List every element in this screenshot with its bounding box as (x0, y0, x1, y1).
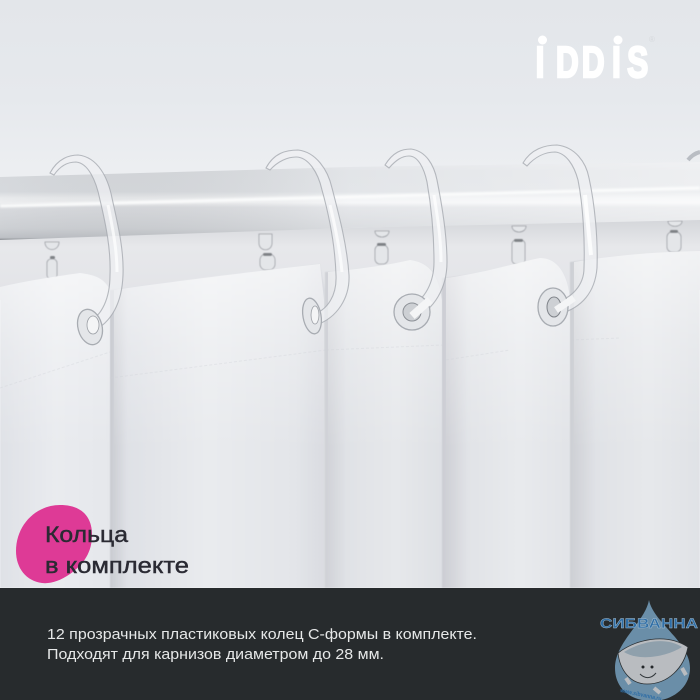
hooks behind the rod (45, 221, 682, 279)
heading: Кольца (45, 522, 129, 547)
ring 1 eyelet (74, 307, 106, 347)
curtain panel 1 (0, 273, 112, 588)
curtain panel 4 (442, 258, 572, 588)
bathtub (618, 639, 688, 693)
ring 2 eyelet (300, 297, 324, 335)
background wall (0, 0, 700, 280)
ring 3 (385, 149, 447, 330)
brand logo iddis: IDDIS (536, 38, 648, 87)
ring 1 (50, 155, 123, 347)
water drop (615, 600, 690, 700)
curtain panel 5 (570, 251, 700, 588)
curtain panel 2 (110, 264, 327, 588)
curtain panel 3 (325, 260, 444, 588)
band under the rod (0, 218, 700, 300)
ring 2 (266, 150, 349, 335)
description text: Подходят для карнизов диаметром до 28 мм. (47, 647, 384, 663)
heading: в комплекте (45, 553, 189, 578)
watermark name: СИБВАННА (600, 615, 698, 631)
description text (47, 627, 477, 663)
dark footer band (0, 588, 700, 700)
ring 4 (523, 145, 597, 326)
pink blob (16, 505, 92, 583)
shower curtain panels (0, 251, 700, 588)
curtain rod (0, 162, 700, 240)
ring 5 partial (688, 152, 700, 160)
highlight on curtain tops (0, 251, 700, 450)
watermark logo (600, 600, 698, 700)
curtain hem stitching (0, 338, 620, 388)
heading (45, 522, 189, 578)
description text: 12 прозрачных пластиковых колец С-формы в комплекте. (47, 627, 477, 643)
ring 3 eyelet (394, 294, 430, 330)
registered mark: ® (649, 35, 655, 44)
ring 4 eyelet (538, 288, 574, 326)
